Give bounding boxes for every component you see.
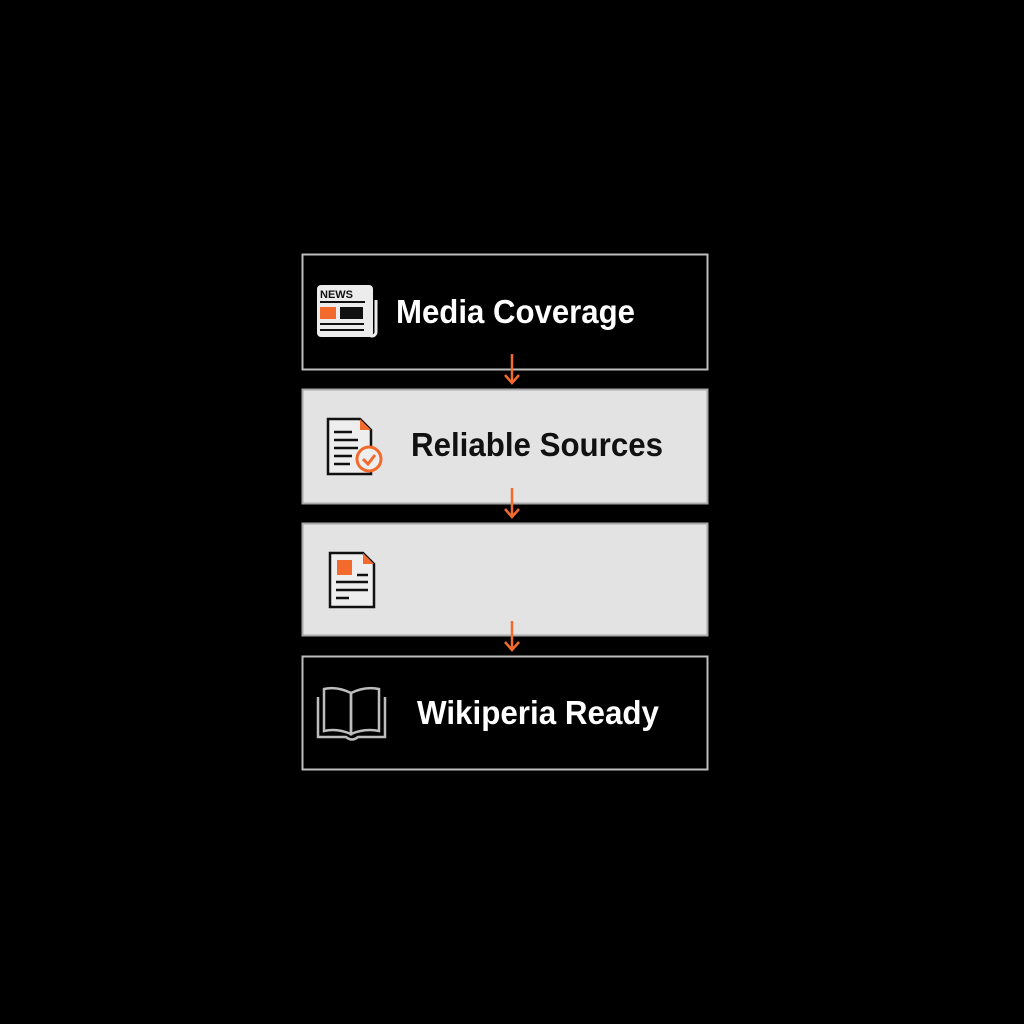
heading: Media Coverage: Media Coverage (396, 293, 635, 330)
heading: Reliable Sources: Reliable Sources (411, 426, 663, 463)
panel: wikipedia ready (302, 656, 708, 770)
heading: Wikiperia Ready: Wikiperia Ready (417, 694, 660, 731)
arrow 3 (505, 621, 519, 650)
icon: open book (318, 688, 385, 740)
icon: newspaper (317, 285, 376, 337)
panel: blank document step (302, 524, 708, 636)
icon: document with check (328, 419, 381, 474)
arrow 1 (505, 354, 519, 383)
arrow 2 (505, 488, 519, 517)
icon: newspaper: NEWS (320, 289, 353, 301)
panel: media coverage (302, 254, 708, 370)
panel: reliable sources (302, 390, 708, 504)
icon: document (330, 553, 374, 607)
